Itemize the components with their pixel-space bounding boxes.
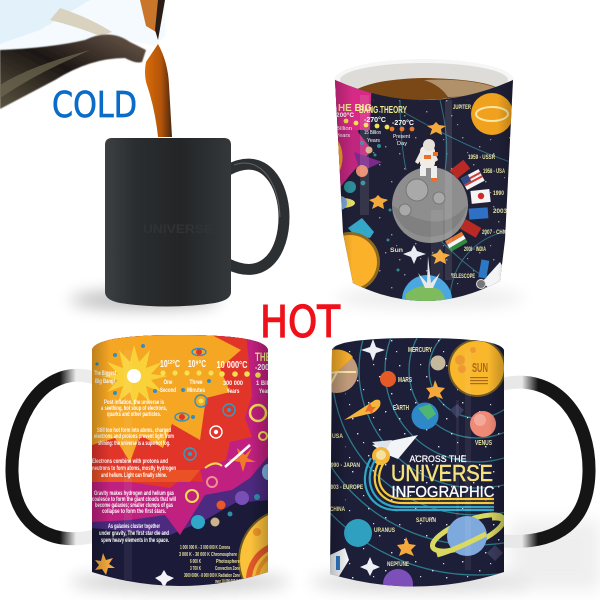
edge shading [88,330,273,595]
timeline dots [160,370,261,378]
explanation paragraphs: coalesce to form the giant clouds that will [92,497,176,503]
headline: big bang theory: HE BIG [338,103,372,114]
mars: MARS [398,377,412,384]
small planets [341,146,372,210]
headline: big bang theory: -270°C [364,116,386,124]
title: UNIVERSE [391,460,493,486]
planets [191,464,274,529]
explanation paragraphs: Gravity makes hydrogen and helium gas [94,491,174,497]
small country labels: URANUS [374,527,395,534]
mug handle [228,164,284,269]
mission labels: 2008 - INDIA [464,246,486,253]
temperature headings: 10 000°C [216,360,248,371]
gold stars [397,380,445,556]
gold stars [369,122,450,264]
galaxy streak [225,445,256,472]
uranus [344,519,372,547]
sun layers labels: 3 000 K - 30 000 K Chromosphere [179,552,237,558]
mug handle [503,382,589,541]
time labels: Years [226,388,240,395]
venus [470,411,496,447]
mission labels: 2003 [493,208,507,215]
temperature headings: 10¹²°C [160,359,180,370]
title: INFOGRAPHIC [392,484,494,501]
headline: big bang theory: Day [397,141,407,147]
timeline dots [344,119,414,131]
white sparkle [403,245,426,264]
temperature headings: 10⁹°C [188,359,206,370]
neptune [383,569,413,599]
explanation paragraphs: shining: the universe is a superhot fog. [98,441,170,447]
moon [392,167,468,243]
mug handle [12,375,95,539]
explanation paragraphs [92,400,176,544]
saturn [428,508,508,558]
small country labels: CHINA [330,506,345,513]
temperature headings: THE [255,350,271,364]
label: hot mug, left view with big bang timeline: over 10 000 000 K Core [215,579,245,585]
time labels [94,370,268,393]
flags [445,160,491,252]
time labels: 300 000 [223,380,243,387]
earth: EARTH [393,405,409,412]
small country labels: 1990 - JAPAN [328,462,360,469]
time labels: Second [160,387,176,394]
white sparkle [155,570,174,588]
central sunburst [101,345,168,408]
glossy reflection [124,350,132,580]
time labels: One [164,379,173,386]
mission labels: JUPITER [453,104,471,111]
time labels: Year [259,388,269,395]
small country labels: USA [332,433,343,440]
explanation paragraphs: under gravity, The first star die and [99,531,169,537]
magenta big-bang wedge [335,80,370,187]
edge shading [326,332,510,597]
crystal [348,218,374,238]
explanation paragraphs: spew heavy elements in the space. [101,538,169,544]
explanation paragraphs: As galaxies cluster together [108,524,160,530]
headline: big bang theory: BANG THEORY [359,104,407,116]
label: HOT: HOT [260,297,340,348]
explanation paragraphs: electrons and protons prevent light from [94,434,174,440]
orbits [272,165,600,575]
mission labels: 1990 [493,190,504,197]
comet [344,400,380,420]
mug body [105,138,231,306]
mission labels: TELESCOPE [451,273,475,280]
temperature headings [160,352,268,370]
orange burst [92,333,241,462]
time labels: 1 Bill [256,380,270,387]
time labels: Three [190,379,203,386]
faint latent logo: UNIVERSE [143,222,213,236]
atoms and galaxies [175,348,267,502]
magenta band [92,335,272,535]
explanation paragraphs: Electrons combine with protons and [92,459,168,465]
temperature headings: -200 [255,363,269,372]
sun layers labels: 6 000 K [190,559,201,565]
title: ACROSS THE [410,454,466,465]
small country labels: 2003 - EUROPE [328,484,363,491]
star dust [373,100,510,288]
time labels: Minutes [187,387,205,394]
earth [393,402,438,430]
mission labels: Sun [390,247,403,254]
headline: big bang theory: -270°C [392,119,414,127]
explanation paragraphs: and helium. Light can finally shine. [101,473,167,479]
mission labels: 1958 - USA [483,168,505,175]
sparkle stars [360,339,503,576]
time labels: Big Bang! [95,378,115,385]
mission labels [390,104,507,280]
explanation paragraphs: quarks and other particles. [107,412,161,418]
venus: VENUS [475,440,492,447]
orbit lines [400,100,509,299]
purple outer band [92,335,270,535]
label: COLD: COLD [52,85,137,126]
dark background [88,330,273,595]
star dots [345,340,500,580]
navy background [326,332,510,597]
explanation paragraphs: Post inflation, the universe is [104,400,164,406]
red band [92,333,252,488]
sun layers labels: 3 700 K [190,566,201,572]
earth [402,256,452,301]
headline: big bang theory: 200°C [336,111,354,119]
jupiter partial [316,350,358,393]
telescope partial [330,548,349,578]
label: hot mug, right view with solar system [272,165,600,599]
surface edge shading [335,80,513,277]
headline: big bang theory: Years [367,138,380,144]
title [391,454,494,501]
explanation paragraphs: become galaxies; smaller clumps of gas [95,503,173,509]
sun layers labels: 1 000 000 K - 3 000 000 K Corona [180,545,231,551]
small country labels: NEPTUNE [387,561,409,568]
small country labels [328,433,436,568]
glossy reflections [456,350,471,570]
mars [380,371,412,387]
mission labels: 1959 - USSR [468,154,495,161]
small country labels: SATURN [416,517,436,524]
mercury [408,347,446,370]
sun layers labels: Convection Zone [215,566,240,572]
pouring coffee pot [0,0,165,109]
explanation paragraphs: Still too hot form into atoms, charged [97,428,171,434]
mug background [335,80,513,301]
jupiter [471,93,513,135]
sun layers labels: 3000 000K - 8 000 000 K Radiation Zone [184,573,240,579]
sun [448,339,506,397]
time labels: The Biggest [94,370,116,377]
small dots [360,141,406,272]
small dots on orange [95,344,211,419]
mug rim and coffee [334,59,514,101]
label: hot mug, left view with big bang timeline [5,335,268,586]
label: hot mug, back view with astronaut [334,59,514,301]
gold star [95,553,115,575]
mission labels: 2007 - CHN [482,229,506,236]
telescope [476,259,502,289]
headline: big bang theory: Present [393,134,410,140]
sun layers labels [179,545,240,583]
rainbow trails [365,458,494,510]
explanation paragraphs: collapse to form the first stars. [102,509,166,515]
small sun with layers [238,513,268,580]
sun: SUN [472,360,488,375]
headline: big bang theory: Billion [336,126,352,132]
headline: big bang theory: 15 Billion [364,130,381,136]
headline: big bang theory: Years [336,133,350,139]
astronaut [415,139,438,182]
floor shadows [70,288,600,592]
headline: big bang theory [336,103,414,147]
mercury: MERCURY [408,347,432,354]
space shuttle [372,435,418,465]
coffee stream [145,44,172,137]
sun layers labels: Photosphere [216,559,240,565]
explanation paragraphs: neutrons to form atoms, mostly hydrogen [92,466,176,472]
cold black mug [105,138,284,306]
explanation paragraphs: a seething, hot soup of electrons, [101,406,167,412]
sun [343,232,380,288]
glossy reflections [360,95,452,280]
